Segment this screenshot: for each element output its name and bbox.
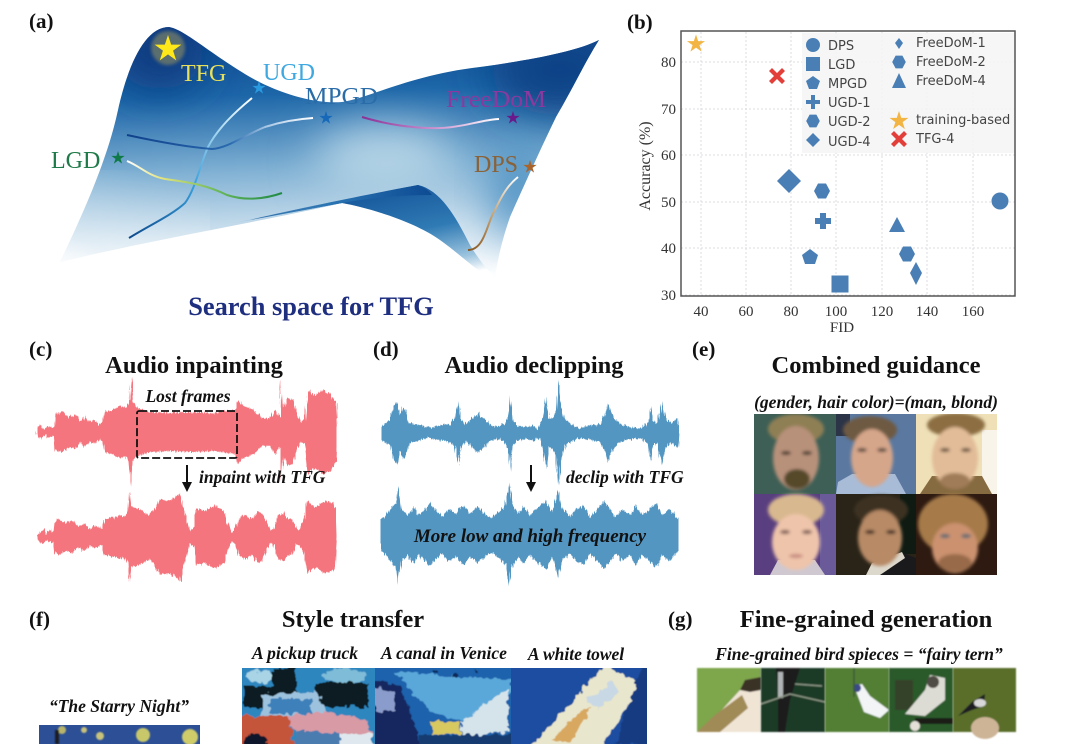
star: DPS — [523, 160, 537, 173]
marker TFG-4 — [769, 68, 785, 84]
curve: DPS trajectory — [468, 177, 518, 250]
label lost frames: Lost frames — [144, 386, 231, 406]
chart plot — [637, 31, 1015, 336]
legend: LGD — [828, 58, 855, 73]
label DPS: DPS — [474, 152, 518, 178]
arrow declip — [526, 465, 536, 492]
label MPGD: MPGD — [305, 84, 378, 110]
x ticks: 100 — [825, 304, 847, 320]
face 6 — [916, 494, 997, 575]
legend — [806, 36, 1010, 150]
legend: TFG-4 — [915, 132, 954, 147]
legend: training-based — [916, 113, 1010, 128]
legend: UGD-4 — [828, 135, 871, 150]
legend: FreeDoM-2 — [916, 55, 986, 70]
heading audio inpainting: Audio inpainting — [105, 352, 284, 379]
label LGD: LGD — [51, 148, 100, 174]
legend: DPS — [828, 39, 854, 54]
panel label e: (e) — [692, 337, 715, 361]
lost frames box — [137, 411, 237, 458]
panel: g fine-grained generation — [668, 606, 1016, 739]
image towel — [511, 668, 647, 744]
legend background — [802, 33, 1015, 153]
heading style transfer: Style transfer — [282, 606, 424, 633]
label towel: A white towel — [527, 644, 624, 664]
y ticks: 30 — [661, 288, 676, 304]
bird 5 — [953, 668, 1016, 739]
curve: UGD trajectory — [129, 98, 252, 238]
y ticks: 40 — [661, 241, 676, 257]
bird images — [697, 668, 1016, 739]
label declip: declip with TFG — [566, 467, 684, 487]
star: MPGD — [319, 111, 333, 124]
legend: UGD-1 — [828, 96, 871, 111]
image pickup truck — [242, 668, 375, 744]
x ticks: 120 — [871, 304, 893, 320]
data markers — [777, 169, 1008, 292]
panel: e combined guidance — [692, 337, 998, 575]
marker training-based — [687, 34, 705, 52]
x ticks: 80 — [784, 304, 798, 320]
face 5 — [836, 494, 916, 575]
curve: FreeDoM trajectory — [362, 117, 499, 128]
style images — [242, 668, 647, 744]
y ticks: 70 — [661, 102, 676, 118]
label canal: A canal in Venice — [380, 643, 507, 663]
x ticks: 140 — [916, 304, 938, 320]
legend: MPGD — [828, 77, 867, 92]
label fairy tern: Fine-grained bird spieces = “fairy tern” — [714, 644, 1003, 664]
x ticks: 40 — [694, 304, 708, 320]
heading combined guidance: Combined guidance — [772, 352, 981, 379]
star: LGD — [111, 151, 125, 164]
label UGD: UGD — [263, 60, 315, 86]
legend: FreeDoM-1 — [916, 36, 986, 51]
face grid — [754, 413, 997, 575]
legend: FreeDoM-4 — [916, 74, 986, 89]
condition label: (gender, hair color)=(man, blond) — [754, 392, 998, 412]
panel: c audio inpainting — [29, 337, 337, 582]
caption search space: Search space for TFG — [188, 291, 434, 321]
panel: b scatter chart — [627, 10, 1015, 336]
heading fine-grained: Fine-grained generation — [740, 606, 993, 633]
x ticks: 60 — [738, 304, 754, 320]
panel: d audio declipping — [373, 337, 684, 587]
label pickup truck: A pickup truck — [251, 643, 358, 663]
surface — [61, 27, 599, 270]
panel: a search space — [29, 9, 630, 321]
waveform clipped — [381, 381, 679, 485]
panel label a: (a) — [29, 9, 54, 33]
star: TFG — [151, 31, 185, 65]
panel: f style transfer — [29, 606, 653, 744]
face 4 — [754, 494, 836, 575]
bird 3 — [825, 668, 889, 732]
label TFG: TFG — [181, 61, 226, 87]
panel label g: (g) — [668, 607, 692, 631]
image starry night — [39, 725, 200, 744]
y ticks: 80 — [661, 55, 676, 71]
label inpaint: inpaint with TFG — [199, 467, 326, 487]
panel label d: (d) — [373, 337, 399, 361]
face 1 — [754, 414, 836, 494]
bird 2 — [761, 668, 825, 732]
waveform lost frames — [37, 376, 337, 488]
panel label b: (b) — [627, 10, 653, 34]
waveform declipped — [381, 483, 679, 587]
bird 1 — [697, 668, 761, 732]
curve: LGD trajectory — [127, 161, 282, 199]
x ticks — [694, 304, 984, 320]
x ticks: 160 — [962, 304, 984, 320]
arrow inpaint — [182, 465, 192, 492]
y ticks: 60 — [661, 148, 676, 164]
y ticks: 50 — [661, 195, 676, 211]
bird 4 — [889, 668, 953, 732]
fold under surface — [250, 185, 495, 278]
label FreeDoM: FreeDoM — [446, 87, 546, 113]
heading audio declipping: Audio declipping — [444, 352, 624, 379]
waveform inpainted — [37, 492, 337, 582]
legend: UGD-2 — [828, 115, 871, 130]
x axis title: FID — [830, 320, 854, 336]
star: UGD — [252, 81, 266, 94]
star: FreeDoM — [506, 111, 520, 124]
curve: MPGD trajectory — [127, 118, 313, 149]
panel label f: (f) — [29, 607, 50, 631]
panel label c: (c) — [29, 337, 52, 361]
face 2 — [836, 414, 916, 494]
image canal — [375, 668, 511, 744]
y ticks — [661, 55, 676, 304]
face 3 — [916, 413, 997, 494]
label starry night: “The Starry Night” — [49, 696, 189, 716]
y axis title: Accuracy (%) — [637, 121, 654, 211]
label frequency: More low and high frequency — [413, 526, 647, 547]
